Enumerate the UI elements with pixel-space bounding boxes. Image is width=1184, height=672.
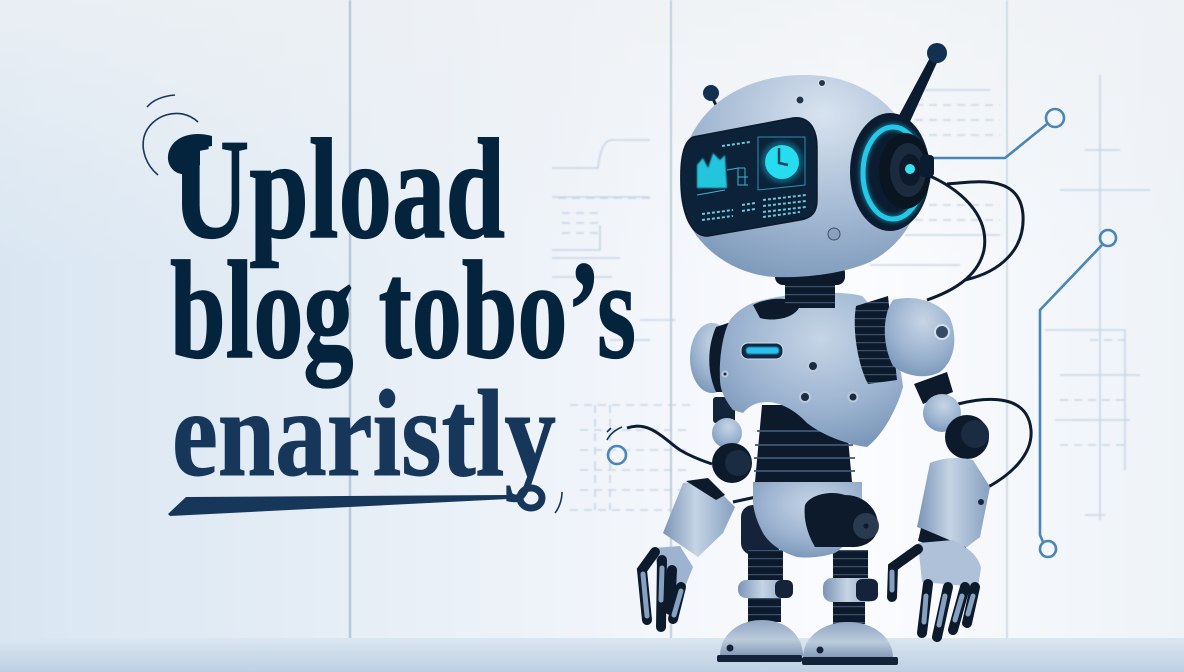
right leg — [802, 550, 898, 665]
torso — [720, 293, 903, 447]
left hand — [642, 546, 693, 627]
left arm — [642, 322, 752, 627]
faint circuit schematic background — [552, 75, 1150, 520]
right shoulder and arm — [855, 296, 990, 637]
heading line: enaristly: enaristly — [172, 365, 556, 502]
decorative arcs — [143, 95, 622, 513]
circuit lines with nodes — [608, 109, 1116, 557]
cables — [627, 173, 1031, 502]
main antenna — [896, 43, 947, 126]
chest light — [741, 343, 783, 359]
screen readouts — [702, 142, 806, 220]
heading line: Upload: Upload — [172, 110, 505, 268]
screen face — [681, 118, 817, 236]
title text — [170, 110, 636, 502]
small antenna — [703, 85, 719, 105]
right hand — [892, 540, 981, 637]
heading line: blog tobo's: blog tobo’s — [170, 233, 636, 388]
torso rivets — [722, 361, 858, 402]
waist spring — [754, 405, 855, 482]
robot — [627, 43, 1031, 665]
screen dial — [758, 137, 805, 190]
pelvis — [753, 482, 879, 558]
neck spring — [775, 265, 845, 308]
head rivets — [796, 80, 840, 240]
head — [680, 75, 919, 277]
neck opening — [753, 299, 800, 320]
y letter tail loop — [520, 488, 542, 508]
U letter swash — [168, 134, 212, 174]
ear ring — [850, 113, 934, 231]
hip joint — [805, 493, 878, 547]
underline swoosh — [168, 495, 508, 516]
screen chart — [697, 153, 748, 195]
left leg — [717, 505, 803, 662]
